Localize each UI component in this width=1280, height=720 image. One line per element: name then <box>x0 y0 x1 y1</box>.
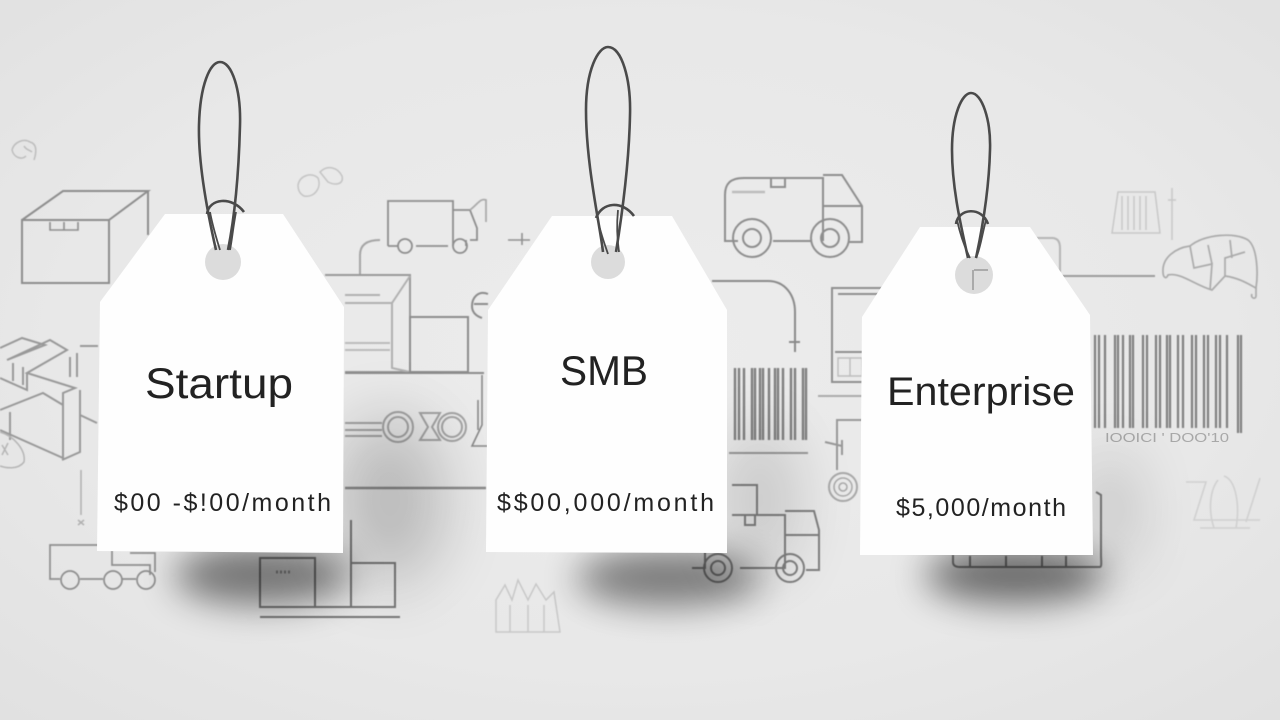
icon: barcode small <box>735 368 806 440</box>
shadow: startup tag <box>174 545 350 605</box>
heading: Startup <box>145 360 293 408</box>
string loop <box>586 47 634 254</box>
icon: faint figures bottom right <box>1186 476 1260 528</box>
icon: machine with conveyor <box>325 275 488 488</box>
shadow: enterprise tag <box>925 547 1105 603</box>
tag hole <box>955 256 993 294</box>
icon: parcels blob <box>1163 235 1257 298</box>
small connector by SMB <box>508 233 530 245</box>
shadow: smb tag <box>576 550 760 606</box>
connector line <box>1062 275 1155 277</box>
price: $00 -$!00/month <box>114 489 331 517</box>
panel: SMB tag <box>486 47 727 553</box>
price: $5,000/month <box>896 494 1066 522</box>
icon: delivery truck large <box>725 175 862 257</box>
panel: Startup tag <box>97 62 344 553</box>
icon: hand truck <box>825 420 870 501</box>
tag hole <box>205 244 241 280</box>
barcode digits: IOOICI ' DOO'10 <box>1105 430 1229 445</box>
tag body <box>97 214 344 553</box>
icon: crate stack <box>260 520 400 617</box>
icon: faint warehouse top right <box>1112 188 1176 240</box>
tag body <box>860 227 1093 555</box>
shadow: smb side <box>725 420 795 580</box>
shadow: startup side <box>335 415 445 585</box>
connector small <box>78 470 84 525</box>
tag body <box>486 216 727 553</box>
icon: delivery van top <box>388 200 486 253</box>
icon: barcode large <box>1095 335 1241 433</box>
icon: tray under enterprise tag <box>953 492 1101 567</box>
heading: SMB <box>560 347 648 394</box>
string loop <box>199 62 244 250</box>
icon: shelf panel <box>818 288 885 396</box>
icon: small scribble <box>298 168 342 196</box>
panel: Enterprise tag <box>860 93 1093 555</box>
arrow: curved connector <box>712 281 800 352</box>
heading: Enterprise <box>887 370 1075 414</box>
string loop <box>952 93 990 290</box>
icon: isometric box stack <box>0 338 98 460</box>
icon: round stamp <box>0 432 24 468</box>
tag hole <box>591 245 625 279</box>
icon: truck bottom center <box>692 485 819 582</box>
price: $$00,000/month <box>497 489 714 517</box>
icon: gauge <box>472 293 488 318</box>
shadow: enterprise side <box>1088 450 1132 570</box>
connector <box>360 240 380 275</box>
icon: truck bottom left <box>50 545 155 589</box>
background logistics icons <box>0 140 1260 632</box>
shadows <box>174 415 1132 606</box>
icon: rounded box behind enterprise tag <box>1035 238 1060 272</box>
icon: top-left scribble <box>12 140 36 160</box>
icon: faint warehouse centre <box>496 580 560 632</box>
icon: cardboard box <box>22 191 148 283</box>
